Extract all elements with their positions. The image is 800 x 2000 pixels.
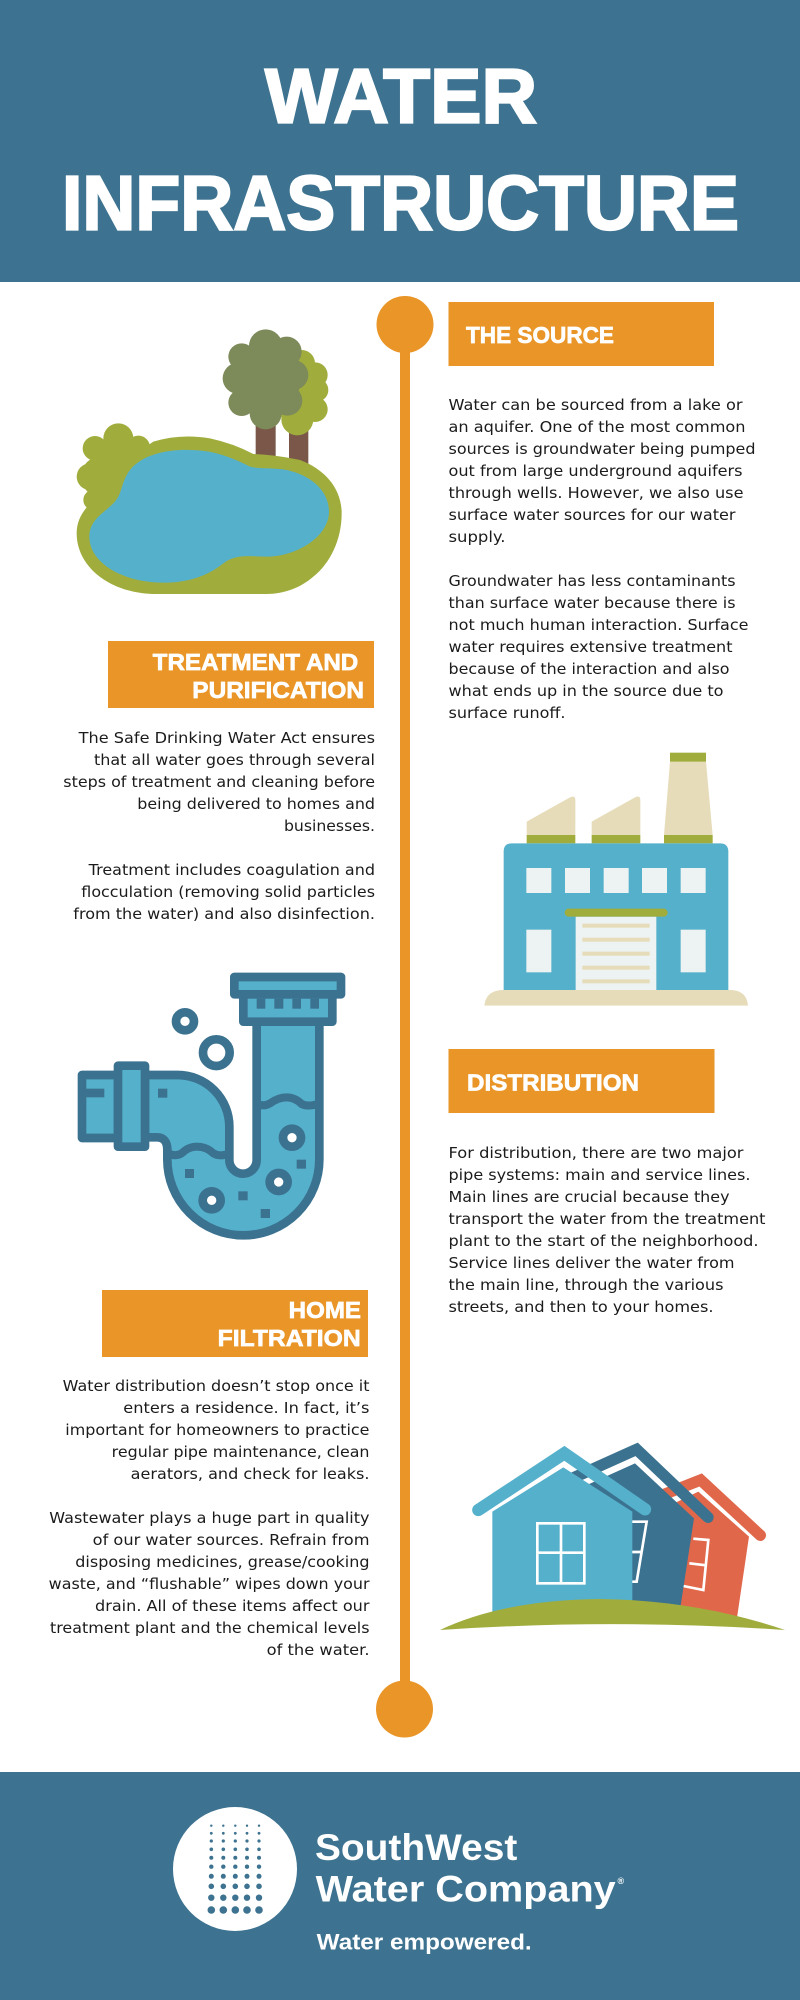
company name and tagline bbox=[315, 1826, 624, 1954]
text block: treatment description: steps of treatment and cleaning before bbox=[63, 773, 375, 791]
text block: treatment description: The Safe Drinking Water Act ensures bbox=[78, 729, 375, 747]
text block: source description bbox=[448, 396, 756, 722]
text block: treatment description: that all water goes through several bbox=[94, 751, 375, 769]
heading: the source: THE SOURCE bbox=[466, 322, 614, 348]
title: WATER bbox=[265, 54, 537, 140]
panel: the source bbox=[448, 302, 756, 722]
text block: distribution description: Service lines deliver the water from bbox=[448, 1254, 734, 1272]
heading: the source bbox=[448, 302, 714, 366]
icon: factory bbox=[484, 753, 748, 1006]
icon: lake with trees bbox=[77, 329, 342, 594]
text block: source description: sources is groundwater being pumped bbox=[448, 440, 756, 458]
text block: treatment description: flocculation (removing solid particles bbox=[81, 883, 375, 901]
text block: treatment description: businesses. bbox=[284, 817, 375, 835]
text block: home filtration description: drain. All of these items affect our bbox=[95, 1597, 370, 1615]
text block: home filtration description: aerators, and check for leaks. bbox=[131, 1465, 370, 1483]
text block: source description: than surface water because there is bbox=[448, 594, 736, 612]
text block: source description: out from large underground aquifers bbox=[448, 462, 743, 480]
text block: source description: an aquifer. One of the most common bbox=[448, 418, 746, 436]
text block: source description: Groundwater has less contaminants bbox=[448, 572, 736, 590]
footer banner bbox=[0, 1772, 800, 2000]
company name and tagline: ® bbox=[618, 1876, 624, 1886]
heading: treatment and purification bbox=[108, 641, 374, 708]
heading: treatment and purification: TREATMENT AND bbox=[153, 649, 358, 675]
text block: home filtration description: treatment plant and the chemical levels bbox=[50, 1619, 370, 1637]
text block: distribution description bbox=[448, 1144, 766, 1316]
company name and tagline: Water Company bbox=[316, 1868, 616, 1910]
icon: company logo bbox=[173, 1807, 297, 1931]
text block: source description: what ends up in the source due to bbox=[448, 682, 724, 700]
header banner with title bbox=[0, 0, 800, 282]
text block: source description: not much human interaction. Surface bbox=[448, 616, 748, 634]
text block: distribution description: the main line, through the various bbox=[448, 1276, 724, 1294]
text block: source description: Water can be sourced from a lake or bbox=[448, 396, 743, 414]
text block: treatment description bbox=[63, 729, 375, 923]
text block: treatment description: being delivered to homes and bbox=[137, 795, 375, 813]
heading: home filtration bbox=[102, 1290, 368, 1357]
text block: source description: because of the interaction and also bbox=[448, 660, 730, 678]
text block: distribution description: streets, and then to your homes. bbox=[448, 1298, 714, 1316]
panel: distribution bbox=[448, 1049, 766, 1316]
heading: distribution bbox=[448, 1049, 714, 1113]
text block: home filtration description: Water distribution doesn’t stop once it bbox=[63, 1377, 370, 1395]
text block: source description: water requires extensive treatment bbox=[448, 638, 733, 656]
central timeline bbox=[376, 296, 434, 1738]
text block: treatment description: Treatment includes coagulation and bbox=[88, 861, 375, 879]
text block: home filtration description: waste, and “flushable” wipes down your bbox=[49, 1575, 370, 1593]
icon: houses bbox=[440, 1449, 785, 1630]
panel: home filtration bbox=[49, 1290, 370, 1659]
company name and tagline: Water empowered. bbox=[317, 1929, 532, 1954]
text block: home filtration description: regular pipe maintenance, clean bbox=[112, 1443, 369, 1461]
text block: distribution description: For distribution, there are two major bbox=[448, 1144, 744, 1162]
title: INFRASTRUCTURE bbox=[62, 160, 739, 246]
text block: source description: through wells. However, we also use bbox=[448, 484, 744, 502]
text block: source description: surface runoff. bbox=[448, 704, 566, 722]
text block: distribution description: pipe systems: main and service lines. bbox=[448, 1166, 750, 1184]
text block: home filtration description: important for homeowners to practice bbox=[65, 1421, 370, 1439]
company name and tagline: SouthWest bbox=[315, 1826, 518, 1868]
text block: home filtration description: Wastewater plays a huge part in quality bbox=[49, 1509, 370, 1527]
text block: home filtration description: disposing medicines, grease/cooking bbox=[75, 1553, 370, 1571]
text block: home filtration description bbox=[49, 1377, 370, 1659]
text block: source description: supply. bbox=[448, 528, 506, 546]
heading: treatment and purification: PURIFICATION bbox=[192, 677, 364, 703]
text block: distribution description: transport the water from the treatment bbox=[448, 1210, 766, 1228]
text block: distribution description: plant to the start of the neighborhood. bbox=[448, 1232, 758, 1250]
text block: home filtration description: of the water. bbox=[267, 1641, 370, 1659]
text block: home filtration description: of our water sources. Refrain from bbox=[93, 1531, 369, 1549]
title bbox=[62, 54, 739, 246]
text block: home filtration description: enters a residence. In fact, it’s bbox=[123, 1399, 370, 1417]
heading: distribution: DISTRIBUTION bbox=[467, 1070, 639, 1096]
heading: home filtration: HOME bbox=[289, 1297, 361, 1323]
text block: source description: surface water sources for our water bbox=[448, 506, 736, 524]
heading: home filtration: FILTRATION bbox=[218, 1325, 361, 1351]
icon: drain pipe bbox=[82, 977, 341, 1235]
text block: treatment description: from the water) and also disinfection. bbox=[73, 905, 375, 923]
panel: treatment and purification bbox=[63, 641, 375, 923]
text block: distribution description: Main lines are crucial because they bbox=[448, 1188, 730, 1206]
